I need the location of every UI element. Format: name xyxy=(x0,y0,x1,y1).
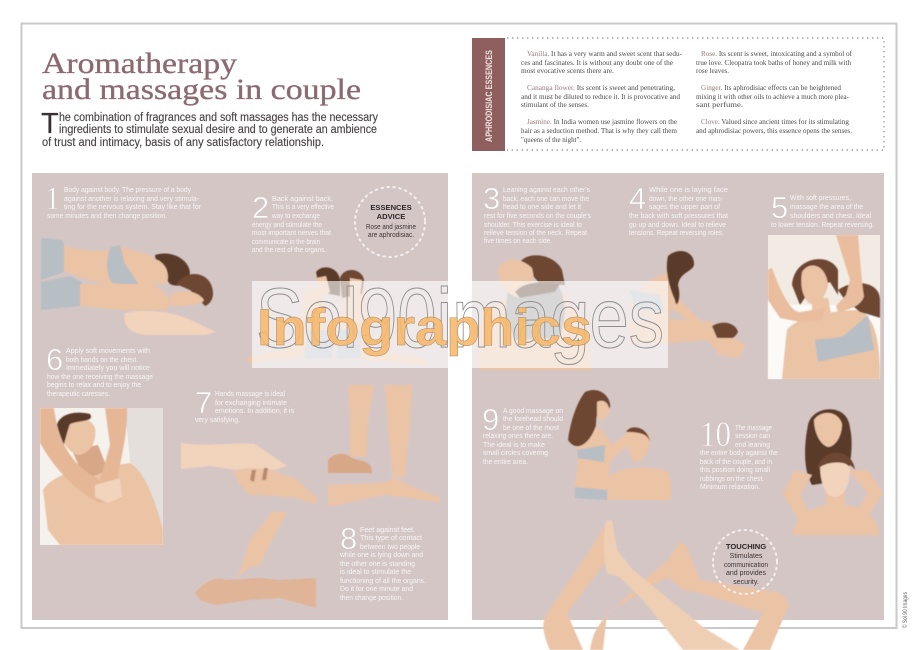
step 3: Leaning against each other's xyxy=(503,187,590,194)
step 7: very satisfying. xyxy=(195,417,240,424)
photo: back to back couple xyxy=(246,267,428,365)
step 2: energy and stimulate the xyxy=(252,222,322,229)
step 10: end leaning xyxy=(735,442,770,449)
photo: feet against legs xyxy=(328,385,441,507)
step 2: communicate in the brain xyxy=(252,239,320,246)
intro text: of trust and intimacy, basis of any satisfactory relationship. xyxy=(42,137,324,149)
panel: aphrodisiac essences xyxy=(472,38,884,151)
step 6: both hands on the chest. xyxy=(66,357,138,364)
callout: essences advice: Rose and jasmine xyxy=(366,224,416,231)
step 7: Hands massage is ideal xyxy=(215,391,285,398)
callout: touching: communication xyxy=(724,562,768,569)
panel: aphrodisiac essences: APHRODISIAC ESSENCES xyxy=(484,50,494,142)
step 10: rubbings on the chest. xyxy=(700,476,764,483)
step 5: to lower tension. Repeat reversing. xyxy=(771,222,874,229)
step 3: head to one side and let it xyxy=(503,204,581,211)
step 3 xyxy=(483,181,591,245)
photo: chest massage xyxy=(40,408,163,545)
title xyxy=(42,47,361,106)
step 6: Apply soft movements with xyxy=(66,348,150,355)
step 2: most important nerves that xyxy=(252,230,331,237)
step 10: session can xyxy=(735,433,770,440)
photo: back massage xyxy=(628,251,746,358)
step 7 xyxy=(195,385,294,424)
step 9: the forehead should xyxy=(503,416,563,423)
intro text: ingredients to stimulate sexual desire and to generate an ambience xyxy=(59,124,377,136)
step 9: The ideal is to make xyxy=(483,442,545,449)
step 8: functioning of all the organs. xyxy=(340,578,426,585)
photo: crossed legs and feet xyxy=(543,520,788,650)
step 10: Minimum relaxation. xyxy=(700,484,760,491)
step 2: This is a very effective xyxy=(272,204,334,211)
step 8 xyxy=(339,521,426,602)
panel: aphrodisiac essences: ces and fascinates. It is without any doubt one of the xyxy=(521,59,673,67)
step 9: relaxing ones there are. xyxy=(483,433,553,440)
photo: couple shoulder massage xyxy=(783,409,883,535)
step 3: relieve tension of the neck. Repeat xyxy=(484,230,587,237)
panel: aphrodisiac essences: and it must be diluted to reduce it. It is provocative and xyxy=(521,93,680,101)
copyright credit: © Sol 90 Images xyxy=(902,592,909,628)
panel: aphrodisiac essences: Vanilla. It has a very warm and sweet scent that sedu- xyxy=(527,50,683,58)
panel: aphrodisiac essences: Clove. Valued since ancient times for its stimulating xyxy=(701,118,849,126)
step 5 xyxy=(771,190,874,229)
step 1: against another is relaxing and very stimula- xyxy=(64,196,200,203)
step 4: down, the other one mas- xyxy=(649,196,724,203)
panel: aphrodisiac essences: hair as a seduction method. That is why they call them xyxy=(521,127,677,135)
step 10: The massage xyxy=(735,425,772,432)
step 6: Immediately you will notice xyxy=(66,365,150,372)
callout: touching: security. xyxy=(733,579,759,586)
callout: touching xyxy=(713,530,777,594)
step 4: sages the upper part of xyxy=(649,204,720,211)
step 5: shoulders and chest. Ideal xyxy=(790,213,871,220)
step 4: go up and down. Ideal to relieve xyxy=(629,222,726,229)
step 7: 7 xyxy=(195,385,212,420)
step 8: the other one is standing xyxy=(340,561,415,568)
watermark: Infographics xyxy=(257,299,592,357)
step 1: some minutes and then change position. xyxy=(47,213,167,220)
panel: aphrodisiac essences: true love. Cleopatra took baths of honey and milk with xyxy=(696,59,851,67)
step 10: the entire body against the xyxy=(700,450,778,457)
title: Aromatherapy xyxy=(42,47,237,80)
panel: aphrodisiac essences: rose leaves. xyxy=(696,67,729,75)
photo: hands massage bottom xyxy=(195,512,316,608)
panel: aphrodisiac essences: Ginger. Its aphrodisiac effects can be heightened xyxy=(701,84,841,92)
intro text: he combination of fragrances and soft massages has the necessary xyxy=(59,112,378,124)
step 8: is ideal to stimulate the xyxy=(340,569,411,576)
step 8: Feet against feet. xyxy=(360,527,415,534)
step 3: rest for five seconds on the couple's xyxy=(484,213,591,220)
step 4 xyxy=(629,181,728,237)
step 6 xyxy=(46,342,153,398)
step 6: therapeutic caresses. xyxy=(47,391,110,398)
photo: forehead massage xyxy=(568,390,672,500)
step 2 xyxy=(252,190,334,254)
step 6: how the one receiving the massage xyxy=(47,374,153,381)
step 10: this position doing small xyxy=(700,467,770,474)
panel: aphrodisiac essences: Cananga flower. Its scent is sweet and penetrating, xyxy=(527,84,675,92)
panel: aphrodisiac essences: stimulant of the senses. xyxy=(521,101,589,109)
step 1: 1 xyxy=(45,181,60,217)
step 6: 6 xyxy=(46,342,63,377)
intro text xyxy=(41,108,378,149)
step 7: emotions. In addition, it is xyxy=(215,408,294,415)
photo: hands massage top xyxy=(181,443,317,505)
step 3: back, each one can move the xyxy=(503,196,589,203)
step 9: the entire area. xyxy=(483,459,528,466)
step 4: 4 xyxy=(629,181,646,216)
step 9: small circles covering xyxy=(483,450,548,457)
step 8: then change position. xyxy=(340,595,403,602)
step 9 xyxy=(482,402,563,466)
step 1 xyxy=(45,181,202,220)
step 8: Do it for one minute and xyxy=(340,586,413,593)
watermark: Sol90images xyxy=(256,271,664,365)
step 9: 9 xyxy=(482,402,499,437)
panel: aphrodisiac essences: mixing it with other oils to achieve a much more plea- xyxy=(696,93,850,101)
panel: right massage page xyxy=(472,173,884,620)
step 5: With soft pressures, xyxy=(790,195,851,202)
panel: aphrodisiac essences: "queens of the night". xyxy=(521,136,581,144)
panel: aphrodisiac essences: Rose. Its scent is sweet, intoxicating and a symbol of xyxy=(701,50,853,58)
panel: aphrodisiac essences: and aphrodisiac powers, this essence opens the senses. xyxy=(696,127,852,135)
step 9: be one of the most xyxy=(503,425,559,432)
callout: touching: and provides xyxy=(726,570,767,577)
step 6: begins to relax and to enjoy the xyxy=(47,382,141,389)
panel: aphrodisiac essences: most evocative scents there are. xyxy=(521,67,614,75)
photo: shoulders and chest massage xyxy=(768,235,880,379)
step 10: back of the couple, and in xyxy=(700,459,772,466)
step 4: tensions. Repeat reversing roles. xyxy=(629,230,724,237)
step 8: while one is lying down and xyxy=(339,552,423,559)
callout: touching: TOUCHING xyxy=(726,542,766,551)
callout: essences advice xyxy=(355,187,425,257)
step 2: way to exchange xyxy=(271,213,320,220)
callout: touching: Stimulates xyxy=(730,553,763,560)
step 8: This type of contact xyxy=(360,535,422,542)
callout: essences advice: ADVICE xyxy=(377,212,405,221)
step 2: Back against back. xyxy=(272,196,333,203)
callout: essences advice: are aphrodisiac. xyxy=(368,232,414,239)
step 2: 2 xyxy=(252,190,269,225)
step 5: 5 xyxy=(771,190,788,225)
panel: aphrodisiac essences: Jasmine. In India women use jasmine flowers on the xyxy=(527,118,677,126)
panel: aphrodisiac essences: sant perfume. xyxy=(696,101,743,109)
step 1: Body against body. The pressure of a body xyxy=(64,187,191,194)
photo: couple lying down xyxy=(41,238,216,335)
step 4: the back with soft pressures that xyxy=(629,213,728,220)
intro text: T xyxy=(41,108,59,140)
step 2: and the rest of the organs. xyxy=(252,247,326,254)
step 3: 3 xyxy=(483,181,500,216)
photo: couple leaning back to back xyxy=(478,255,592,370)
step 8: between two people xyxy=(360,544,420,551)
step 9: A good massage on xyxy=(503,408,563,415)
step 8: 8 xyxy=(340,521,357,556)
step 10 xyxy=(700,414,778,491)
step 4: While one is laying face xyxy=(649,187,728,194)
title: and massages in couple xyxy=(42,73,361,106)
step 7: for exchanging intimate xyxy=(215,400,287,407)
step 5: massage the area of the xyxy=(790,204,863,211)
callout: essences advice: ESSENCES xyxy=(370,203,412,212)
panel: left massage page xyxy=(32,173,448,620)
step 3: shoulder. This exercise is ideal to xyxy=(484,222,582,229)
step 3: five times on each side. xyxy=(484,238,552,245)
step 10: 10 xyxy=(700,414,731,454)
step 1: ting for the nervous system. Stay like that for xyxy=(64,204,202,211)
